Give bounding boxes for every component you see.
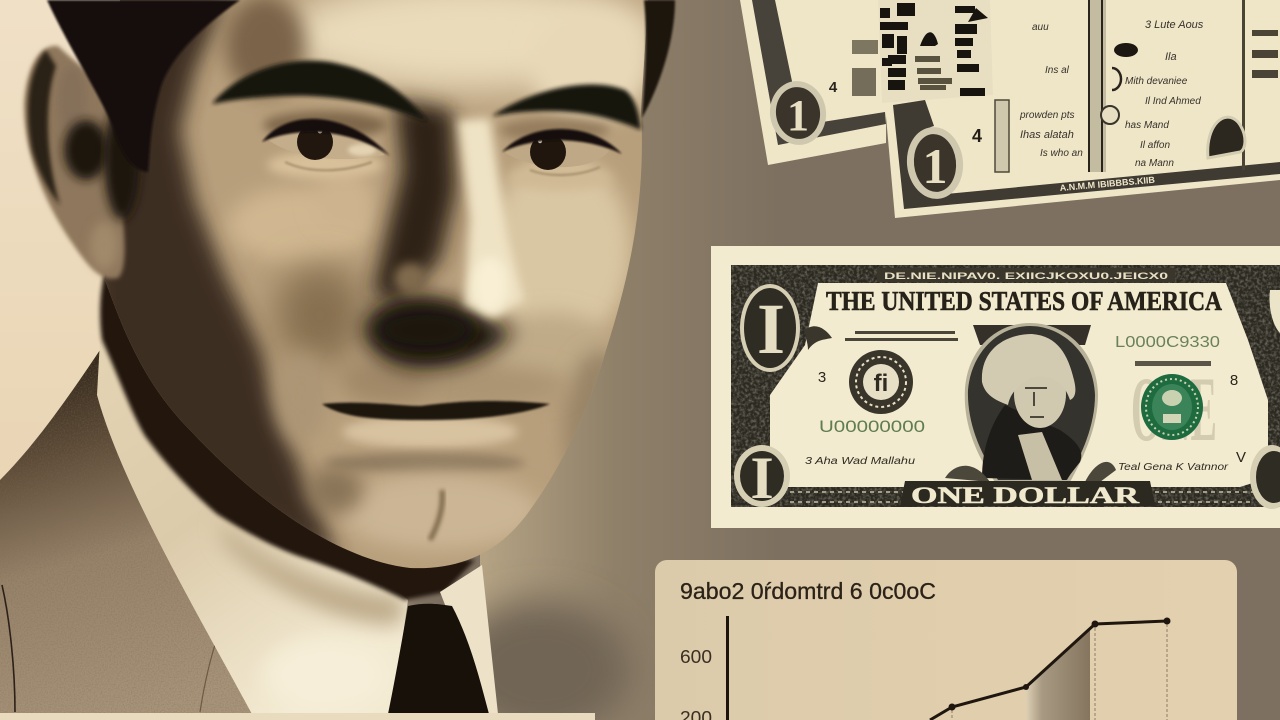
right collar	[440, 565, 498, 714]
black treasury seal: fi	[874, 370, 888, 397]
y axis label 600: 600	[680, 647, 712, 667]
neck shadow	[100, 270, 475, 600]
note corner numeral: 1	[787, 91, 809, 140]
ear	[24, 46, 140, 279]
shirt shadow	[217, 520, 405, 625]
line chart panel	[655, 560, 1237, 720]
large rotated dollar note, top	[870, 0, 1280, 225]
y axis	[726, 616, 729, 720]
top-left numeral oval: I	[757, 289, 785, 369]
chin cleft	[430, 490, 442, 540]
dashed drop lines	[952, 624, 1167, 720]
handwriting scribbles: na Mann	[1135, 158, 1174, 169]
note number: 4	[972, 126, 982, 146]
portrait of a man in a suit	[0, 0, 675, 720]
vertical ornament column	[995, 0, 1245, 172]
handwriting scribbles: Il Ind Ahmed	[1145, 96, 1201, 107]
handwriting scribbles: Mith devaniee	[1125, 76, 1188, 87]
green serial left: U00000000	[819, 417, 925, 436]
face	[90, 0, 660, 580]
coat	[982, 405, 1081, 480]
frame speckle texture	[731, 265, 1280, 507]
ONE DOLLAR lettering: ONE DOLLAR	[911, 483, 1140, 508]
bottom caption strip	[0, 713, 595, 720]
stamp	[1208, 117, 1245, 158]
hair	[47, 0, 675, 172]
green serial right: L0000C9330	[1115, 334, 1220, 351]
top serial plate: DE.NIE.NIPAV0. EXIICJKOXU0.JEICX0	[884, 271, 1168, 282]
right side number: 8	[1230, 372, 1238, 389]
small treasury lines	[845, 331, 958, 341]
area shading	[1026, 630, 1090, 720]
handwriting scribbles	[1019, 19, 1204, 169]
mouth	[322, 401, 550, 420]
top serial plate	[877, 268, 1175, 282]
necktie	[388, 604, 489, 714]
right ornament and oval	[1250, 290, 1280, 509]
portrait of Washington	[965, 323, 1098, 482]
handwriting scribbles: Ila	[1165, 51, 1177, 63]
handwriting scribbles: has Mand	[1125, 120, 1169, 131]
note corner numeral	[770, 81, 826, 145]
title banner text: THE UNITED STATES OF AMERICA	[826, 286, 1222, 316]
shirt ruffle	[1018, 432, 1062, 480]
shirt collar	[97, 340, 408, 714]
left signature: 3 Aha Wad Mallahu	[805, 456, 916, 467]
black treasury seal	[849, 350, 913, 414]
small right line	[1135, 361, 1211, 366]
handwriting scribbles: Il affon	[1140, 140, 1170, 151]
top-left numeral oval	[740, 284, 800, 372]
handwriting scribbles: Is who an	[1040, 148, 1083, 159]
paper patch with black blocks	[878, 0, 993, 103]
handwriting scribbles: 3 Lute Aous	[1145, 19, 1204, 31]
note frame	[893, 100, 1280, 209]
bottom-left numeral oval	[734, 445, 790, 511]
bottom-left numeral oval: I	[750, 445, 774, 511]
note corner numeral: 1	[922, 138, 948, 194]
right column text blocks	[1252, 30, 1278, 78]
handwriting scribbles: auu	[1032, 22, 1049, 33]
green treasury seal	[1141, 374, 1203, 440]
note corner numeral	[906, 127, 963, 199]
left eye	[262, 111, 390, 179]
left eyebrow	[212, 61, 428, 122]
one dollar bill	[711, 246, 1280, 528]
suit jacket	[0, 350, 260, 720]
note frame	[752, 0, 886, 145]
bill paper	[711, 246, 1280, 528]
shirt front highlight	[263, 637, 387, 713]
data line	[930, 618, 1170, 720]
leaves beside portrait	[945, 462, 1116, 482]
handwriting scribbles: Ihas alatah	[1020, 129, 1074, 141]
ONE DOLLAR lettering	[900, 481, 1155, 508]
head	[1014, 376, 1066, 428]
handwriting scribbles: Ins al	[1045, 65, 1070, 76]
bill engraved frame	[731, 265, 1280, 507]
bottom frame texture	[790, 492, 1260, 502]
one dollar bill: V	[1236, 449, 1246, 466]
left side numbers: 3	[818, 369, 826, 386]
right signature: Teal Gena K Vatnnor	[1118, 462, 1229, 473]
handwriting scribbles: prowden pts	[1019, 110, 1074, 121]
right eye	[500, 118, 622, 190]
small rotated dollar note, top	[740, 0, 886, 165]
right eyebrow	[492, 84, 641, 130]
note number: 4	[829, 79, 838, 96]
band lettering: A.N.M.M IBIBBBS.KIIB	[1059, 175, 1156, 193]
chart title: 9abo2 0ŕdomtrd 6 0c0oC	[680, 578, 936, 604]
left leaf ornament	[805, 326, 832, 350]
wig	[982, 334, 1075, 405]
